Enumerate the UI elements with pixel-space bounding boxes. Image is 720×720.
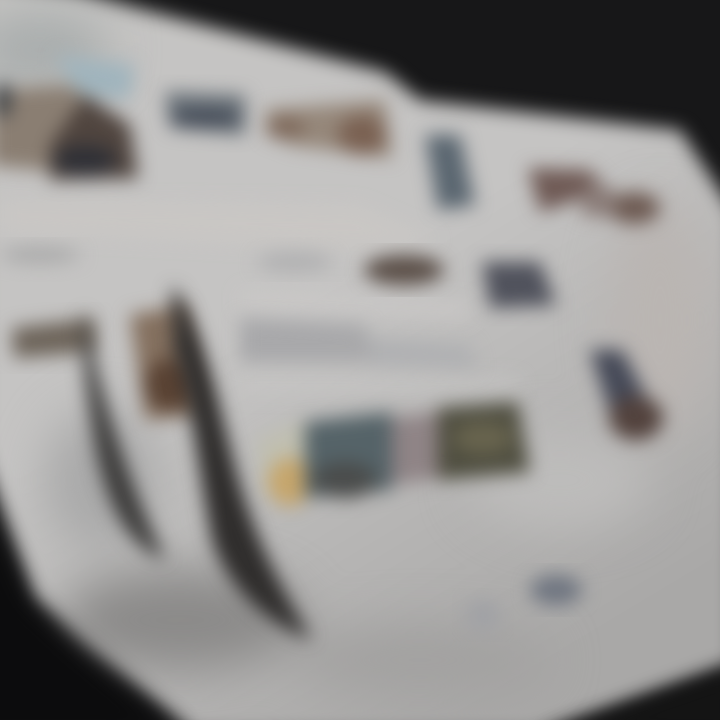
text block: faint grey lines on upper page <box>0 247 333 272</box>
photo: top left page image <box>0 55 138 180</box>
photo: right page teal image <box>425 135 475 210</box>
photo: lower right small blue mark <box>530 575 582 605</box>
dark shadow bottom right <box>545 670 720 720</box>
photo: top centre blue image <box>165 92 245 135</box>
photo: top centre brown image <box>262 100 392 158</box>
photo: centre small navy image <box>482 262 556 308</box>
page curl: right dark fold <box>172 285 312 640</box>
photo: brown and orange image on curled page <box>130 305 205 420</box>
text block: grey blurred lines <box>240 318 478 368</box>
photo: right page brown image <box>528 168 660 224</box>
panel: bright paper bands <box>0 200 520 395</box>
photo: right navy and brown image <box>590 350 663 440</box>
photo: wide image strip <box>258 402 530 508</box>
page curl: left dark fold <box>83 310 165 560</box>
photo: left brown strip <box>12 318 95 358</box>
faint lower mark <box>466 600 500 630</box>
dark shadow bottom left <box>0 470 180 720</box>
photo: centre small brown image <box>364 255 444 285</box>
